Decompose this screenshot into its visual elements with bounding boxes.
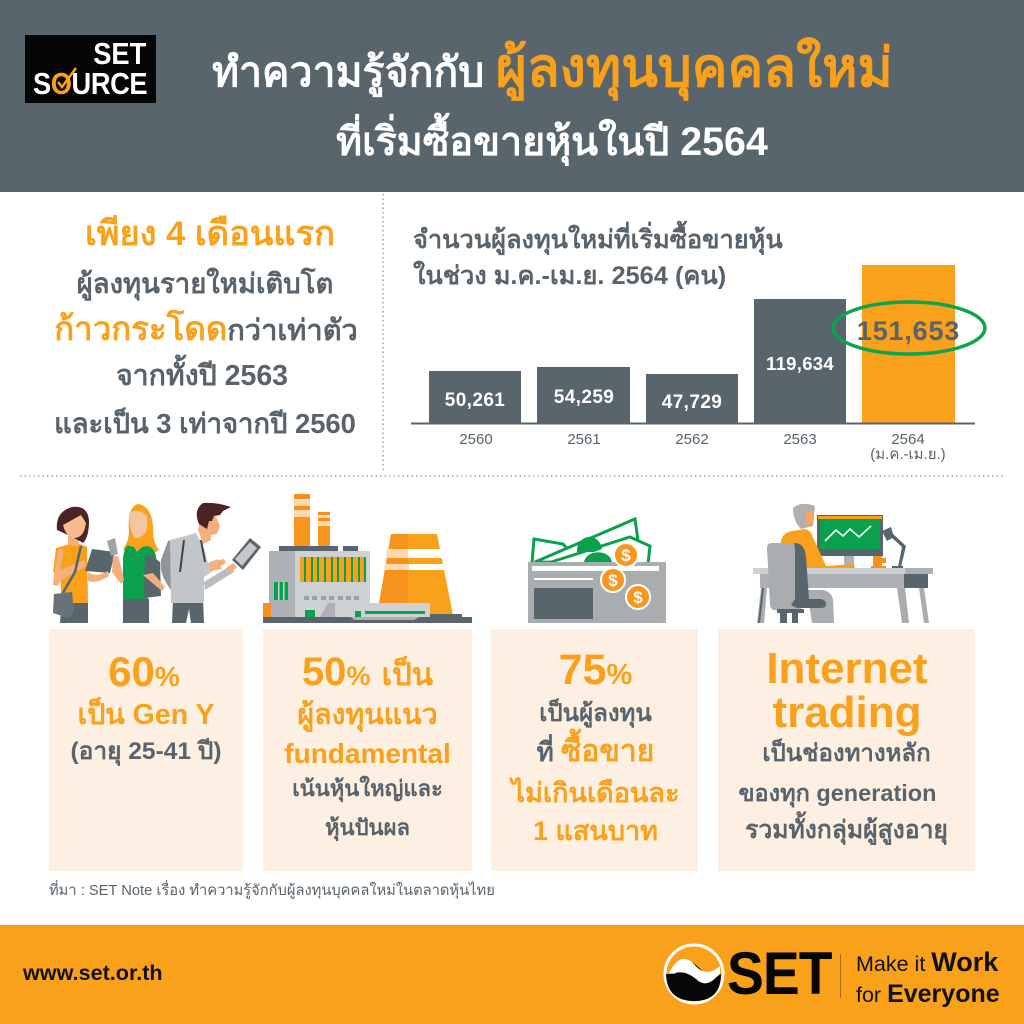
bar 2562: 2562 — [675, 431, 709, 448]
logo: SET SOURCE: SOURCE — [33, 66, 147, 101]
chart title: ในช่วง ม.ค.-เม.ย. 2564 (คน) — [413, 262, 726, 290]
stat Internet trading — [766, 644, 928, 737]
SET wordmark: SET — [727, 940, 832, 1007]
main title line 1: ทำความรู้จักกับ ผู้ลงทุนบุคคลใหม่ — [212, 39, 893, 98]
desk — [753, 568, 933, 574]
chart title: จำนวนผู้ลงทุนใหม่ที่เริ่มซื้อขายหุ้น — [413, 226, 783, 254]
bar chart — [411, 265, 987, 463]
bar 2562 — [646, 374, 738, 448]
icon: three young investors — [53, 502, 261, 623]
detail line 2: ที่ ซื้อขาย — [537, 735, 654, 768]
icon: wallet with banknotes and coins: $ — [633, 588, 643, 607]
icon: factory — [263, 494, 472, 623]
icon: person trading at desk — [753, 504, 933, 623]
bar 2560 — [429, 371, 521, 448]
detail text: เน้นหุ้นใหญ่และ — [292, 776, 443, 801]
stat Internet trading: Internet — [766, 644, 928, 693]
website: www.set.or.th — [23, 960, 163, 985]
cup — [873, 556, 886, 567]
slogan: for Everyone — [856, 980, 1000, 1008]
highlight ellipse — [833, 302, 985, 354]
legs — [807, 590, 834, 623]
chair — [767, 543, 804, 610]
icon: wallet with banknotes and coins — [528, 516, 666, 623]
bar 2564: 2564 — [891, 431, 925, 448]
age range: (อายุ 25-41 ปี) — [70, 738, 221, 765]
stat 50%: 50% เป็น — [302, 650, 433, 694]
logo: SET SOURCE — [25, 35, 156, 103]
detail text line 3: รวมทั้งกลุ่มผู้สูงอายุ — [745, 817, 948, 844]
detail text: เป็นผู้ลงทุน — [539, 700, 652, 727]
bar 2563 — [754, 299, 846, 448]
stat 60%: 60% — [108, 648, 180, 695]
stat label investor: ผู้ลงทุนแนว — [297, 699, 438, 731]
bar 2563: 2563 — [783, 431, 817, 448]
main title line 2: ที่เริ่มซื้อขายหุ้นในปี 2564 — [336, 120, 768, 164]
woman left — [53, 507, 115, 623]
bar 2562: 47,729 — [662, 392, 722, 413]
stat Internet trading: trading — [772, 688, 922, 737]
bar 2564 — [857, 265, 960, 463]
icon: wallet with banknotes and coins: $ — [608, 571, 618, 590]
stat label Gen Y: เป็น Gen Y — [77, 699, 215, 731]
source note: ที่มา : SET Note เรื่อง ทำความรู้จักกับผู้ลงทุนบุคคลใหม่ในตลาดหุ้นไทย — [49, 883, 495, 899]
summary line 3: ก้าวกระโดดกว่าเท่าตัว — [54, 310, 358, 347]
summary line 2: ผู้ลงทุนรายใหม่เติบโต — [77, 268, 333, 299]
highlighted limit: ไม่เกินเดือนละ — [512, 778, 679, 808]
slogan: Make it Work — [856, 947, 998, 977]
stat 75%: 75% — [559, 646, 632, 694]
bar 2563: 119,634 — [766, 353, 834, 374]
bar 2560: 50,261 — [445, 390, 505, 411]
panel: trading value — [491, 629, 698, 871]
panel: Gen Y — [49, 629, 243, 871]
panel: internet trading — [718, 629, 975, 871]
stat label fundamental: fundamental — [284, 738, 451, 769]
bar 2561: 54,259 — [554, 387, 614, 408]
bar 2561: 2561 — [567, 431, 601, 448]
bar 2560: 2560 — [459, 431, 493, 448]
lamp — [882, 527, 906, 567]
detail text — [292, 776, 443, 842]
logo: SET SOURCE: SET — [93, 36, 146, 71]
icon: wallet with banknotes and coins: $ — [621, 546, 631, 565]
man with backpack — [161, 503, 261, 623]
detail text: หุ้นปันผล — [325, 815, 410, 840]
chart title — [413, 220, 783, 290]
summary line 4: จากทั้งปี 2563 — [116, 360, 288, 392]
panel: fundamental — [263, 629, 472, 871]
detail text line 2: ของทุก generation — [738, 780, 937, 806]
summary line 5: และเป็น 3 เท่าจากปี 2560 — [54, 408, 356, 439]
footer band — [0, 925, 1024, 1024]
person — [793, 504, 815, 529]
SET logo mark — [664, 944, 724, 1004]
bar 2564: 151,653 — [857, 316, 960, 346]
slogan — [856, 947, 1000, 1008]
woman middle — [107, 504, 165, 623]
detail text line 1: เป็นช่องทางหลัก — [762, 740, 931, 767]
bar 2564: (ม.ค.-เม.ย.) — [870, 446, 946, 463]
summary heading: เพียง 4 เดือนแรก — [85, 215, 335, 253]
header band — [0, 0, 1024, 192]
highlighted amount: 1 แสนบาท — [533, 816, 658, 846]
monitor — [817, 515, 883, 556]
bar 2561 — [537, 367, 630, 448]
panel: summary text — [54, 215, 358, 439]
